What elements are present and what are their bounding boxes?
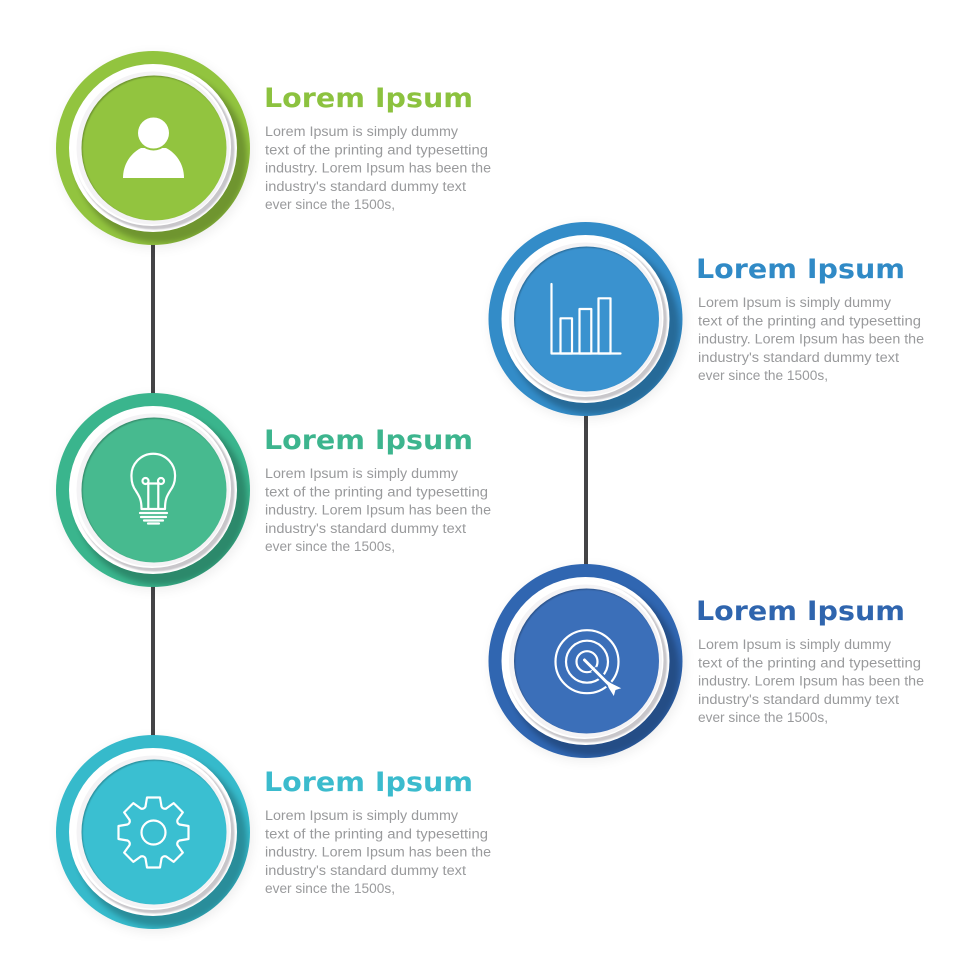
body 3 <box>265 808 491 897</box>
icon: target with arrow <box>556 630 621 696</box>
step 2: teal bulb node <box>56 393 252 590</box>
body 2: industry. Lorem Ipsum has been the <box>265 503 491 519</box>
step 5: dark blue target node <box>488 564 684 761</box>
heading 2: Lorem Ipsum <box>264 425 473 456</box>
body 1: Lorem Ipsum is simply dummy <box>265 124 459 140</box>
body 1: text of the printing and typesetting <box>265 142 488 158</box>
body 4: Lorem Ipsum is simply dummy <box>698 295 892 311</box>
body 2: ever since the 1500s, <box>265 539 395 555</box>
body 5: industry's standard dummy text <box>698 692 899 708</box>
text block 3 <box>264 767 491 897</box>
body 3: industry. Lorem Ipsum has been the <box>265 845 491 861</box>
body 2: Lorem Ipsum is simply dummy <box>265 466 459 482</box>
body 5: industry. Lorem Ipsum has been the <box>698 674 924 690</box>
body 4: ever since the 1500s, <box>698 368 828 384</box>
icon: light bulb <box>131 454 175 524</box>
body 2: industry's standard dummy text <box>265 521 466 537</box>
body 3: ever since the 1500s, <box>265 881 395 897</box>
body 1: ever since the 1500s, <box>265 197 395 213</box>
body 5: ever since the 1500s, <box>698 710 828 726</box>
text block 5 <box>696 596 924 726</box>
connector line: left lower <box>151 582 155 740</box>
body 4: industry's standard dummy text <box>698 350 899 366</box>
icon: gear <box>118 798 188 868</box>
body 4 <box>698 295 924 384</box>
body 1: industry. Lorem Ipsum has been the <box>265 161 491 177</box>
text block 1 <box>264 83 491 213</box>
connector line: left upper <box>151 240 155 398</box>
icon: bar chart <box>552 284 620 354</box>
body 4: text of the printing and typesetting <box>698 314 921 330</box>
body 1: industry's standard dummy text <box>265 179 466 195</box>
body 5 <box>698 637 924 726</box>
body 2: text of the printing and typesetting <box>265 484 488 500</box>
body 3: Lorem Ipsum is simply dummy <box>265 808 459 824</box>
step 4: blue chart node <box>488 222 684 419</box>
heading 1: Lorem Ipsum <box>264 83 473 114</box>
text block 2 <box>264 425 491 555</box>
heading 3: Lorem Ipsum <box>264 767 473 798</box>
heading 5: Lorem Ipsum <box>696 596 905 627</box>
body 5: text of the printing and typesetting <box>698 656 921 672</box>
text block 4 <box>696 254 924 384</box>
heading 4: Lorem Ipsum <box>696 254 905 285</box>
body 3: industry's standard dummy text <box>265 863 466 879</box>
connector line: right <box>584 411 588 569</box>
step 3: cyan gear node <box>56 735 252 932</box>
body 2 <box>265 466 491 555</box>
body 4: industry. Lorem Ipsum has been the <box>698 332 924 348</box>
body 1 <box>265 124 491 213</box>
step 1: green person node <box>56 51 252 248</box>
icon: person <box>123 116 184 178</box>
body 3: text of the printing and typesetting <box>265 826 488 842</box>
body 5: Lorem Ipsum is simply dummy <box>698 637 892 653</box>
